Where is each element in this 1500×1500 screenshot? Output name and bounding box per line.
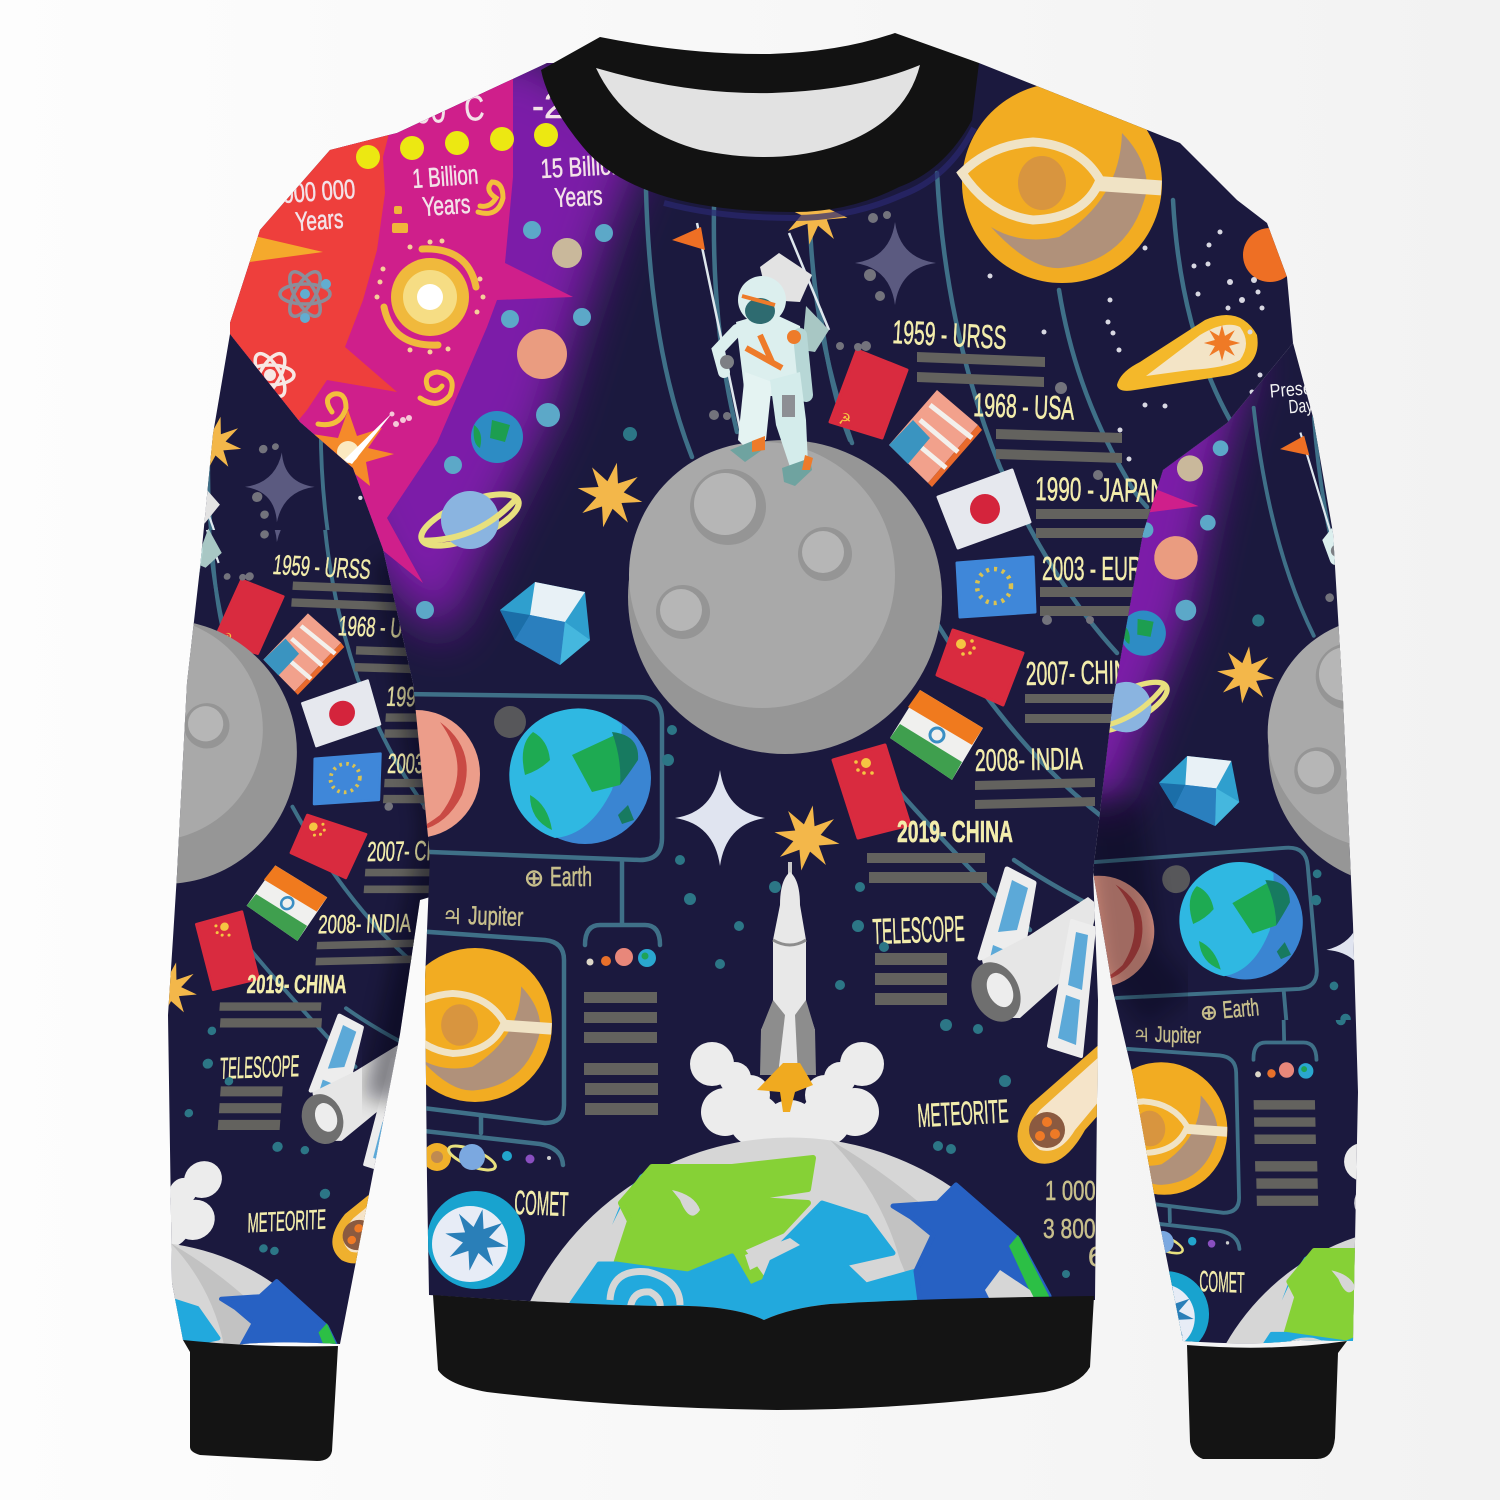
printed artwork: TELESCOPE	[872, 908, 965, 952]
atom gray	[280, 267, 331, 323]
years label: 000 000	[281, 174, 356, 209]
distance text: 3 800 KM	[1043, 1213, 1133, 1244]
right sleeve	[1093, 343, 1358, 1344]
satellite telescope	[962, 869, 1098, 1056]
planet: mars section	[352, 710, 480, 838]
telescope label and bars	[872, 908, 965, 1005]
text bars	[584, 992, 658, 1115]
temperature heading 2: -270° C	[532, 85, 654, 126]
small marks	[392, 206, 408, 233]
earth label: ⊕	[524, 865, 544, 892]
present day label: Day	[686, 180, 714, 205]
timeline: 2007 China: 2007- CHINA	[1025, 653, 1141, 692]
planet: orange	[1243, 228, 1297, 282]
present day label: Present	[666, 160, 730, 185]
left sleeve	[168, 334, 430, 1344]
bottom hem	[433, 1295, 1094, 1410]
comet disc	[427, 1191, 525, 1289]
jupiter label: Jupiter	[468, 900, 524, 932]
collar piping	[664, 128, 974, 218]
rocket flame	[757, 1063, 813, 1112]
flare: purple fade	[250, 40, 650, 640]
timeline: 2003 Europe: 2003 - EUROPE	[1042, 550, 1182, 587]
connector: jupiter to mini planets	[415, 1117, 563, 1165]
mini planets row	[586, 948, 656, 967]
timeline: 1990 Japan	[1035, 470, 1166, 538]
flare: orange wedge	[250, 236, 323, 262]
spirals	[318, 182, 503, 425]
atom white	[253, 352, 296, 398]
15 billion years label: Years	[554, 181, 603, 213]
teal particles	[623, 427, 1070, 1278]
sweatshirt body with printed infographic	[220, 40, 1310, 1340]
collar inner lining	[596, 65, 920, 157]
flag pole and pennant	[672, 223, 741, 433]
timeline: 2019 China	[867, 814, 1013, 883]
connector: earth to mini planets	[585, 862, 660, 945]
temperature heading: 3000° C	[383, 87, 485, 133]
1 billion years label: 1 Billion	[411, 159, 479, 194]
right cuff	[1187, 1341, 1347, 1459]
rocket	[760, 862, 816, 1075]
flag: China 1	[937, 630, 1023, 705]
astronaut	[718, 253, 829, 486]
years label: Years	[294, 204, 344, 237]
jupiter label	[441, 899, 524, 932]
meteorite	[1018, 1000, 1165, 1164]
panel: earth frame	[400, 694, 662, 860]
distance text	[1043, 1175, 1135, 1272]
left cuff	[183, 1340, 338, 1461]
star: dim	[855, 222, 936, 305]
flag: India	[890, 690, 983, 780]
gray and white specks	[709, 211, 1103, 625]
planet: jupiter section	[398, 948, 552, 1102]
present day label	[1270, 384, 1311, 416]
timeline: 1968 USA: 1968 - USA	[973, 386, 1075, 427]
timeline: 2008 India	[975, 741, 1095, 809]
orbit lines	[646, 173, 1230, 930]
galaxy	[374, 238, 486, 354]
15 billion years label: 15 Billion	[540, 150, 623, 184]
timeline: 2008 India: 2008- INDIA	[975, 741, 1083, 778]
flag: USSR: ☭	[838, 411, 851, 428]
saturn	[411, 474, 529, 566]
planet: earth	[509, 708, 651, 844]
planet: top jupiter section	[962, 83, 1162, 283]
moon	[628, 440, 942, 754]
panel: jupiter frame	[415, 931, 564, 1123]
star: white	[675, 770, 765, 866]
explosion	[314, 410, 394, 486]
timeline dots	[356, 123, 558, 169]
planet dots	[416, 221, 613, 619]
flare: red band	[230, 135, 397, 420]
timeline: 1968 USA	[973, 386, 1122, 463]
printed artwork: COMET	[514, 1184, 569, 1224]
star: gold top	[777, 174, 853, 250]
moon gray	[494, 706, 526, 738]
timeline: 1990 Japan: 1990 - JAPAN	[1035, 470, 1166, 509]
flare: magenta band	[230, 70, 573, 583]
collar ring	[541, 33, 979, 212]
flag: USA	[889, 390, 982, 487]
distance text: 1 000 000	[1045, 1175, 1135, 1206]
peach planet	[517, 329, 567, 379]
timeline: 2007 China	[1025, 653, 1141, 723]
star: gold left	[571, 456, 649, 534]
planet earth bottom	[515, 1138, 1065, 1340]
timeline: 1959 URSS: 1959 - URSS	[892, 313, 1007, 356]
1 billion years label	[414, 165, 478, 216]
timeline: 2019 China: 2019- CHINA	[897, 814, 1013, 849]
printed artwork: METEORITE	[916, 1092, 1009, 1134]
gem	[500, 582, 590, 665]
flag: USSR	[830, 350, 907, 438]
printed artwork	[220, 40, 1297, 1340]
earth label: Earth	[550, 861, 592, 892]
antenna	[789, 233, 829, 330]
comet top right	[1117, 315, 1258, 391]
1 billion years label: Years	[421, 189, 471, 222]
15 billion years label	[542, 156, 615, 207]
flag: Japan	[938, 470, 1030, 548]
distance text: 6	[1088, 1241, 1104, 1272]
jupiter label: ♃	[441, 899, 464, 932]
flag: China 2	[833, 745, 910, 838]
years label	[285, 179, 355, 231]
small earth	[471, 411, 523, 463]
mini planets row 2	[423, 1141, 551, 1175]
small dots near rocket	[390, 412, 412, 427]
timeline: 2003 Europe	[1040, 550, 1182, 616]
star: gold rocket	[769, 800, 845, 876]
tan planet	[552, 238, 582, 268]
flag: EU	[957, 557, 1035, 617]
earth label	[524, 861, 592, 892]
rocket smoke	[690, 1042, 884, 1156]
timeline: 1959 URSS	[892, 313, 1045, 387]
